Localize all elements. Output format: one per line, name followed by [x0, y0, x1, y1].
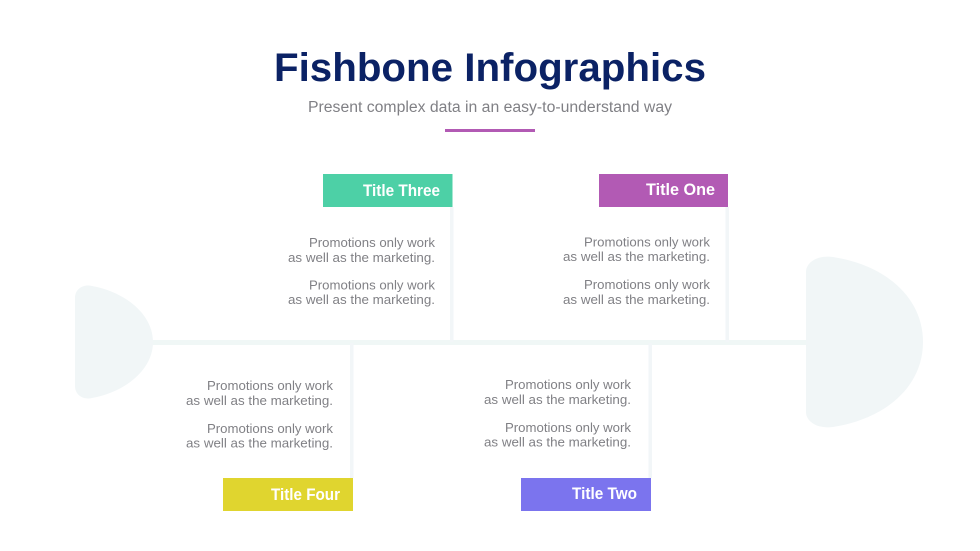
label: title two [521, 478, 651, 511]
text block: title two: as well as the marketing. [484, 434, 631, 450]
spine [150, 340, 810, 345]
label: title three [323, 174, 452, 207]
text block: title one: as well as the marketing. [563, 292, 710, 307]
bone: title two [648, 343, 652, 478]
text block: title four: Promotions only work [207, 378, 333, 393]
text block: title three: Promotions only work [309, 235, 435, 250]
text block: title four: as well as the marketing. [186, 436, 333, 450]
text block: title four: as well as the marketing. [186, 393, 333, 408]
fish skeleton [150, 207, 810, 478]
panel: title two [484, 377, 651, 511]
bone: title one [726, 207, 729, 342]
text block: title one: Promotions only work [584, 277, 710, 292]
bone: title three [450, 207, 454, 342]
subtitle: Present complex data in an easy-to-understand way [308, 99, 672, 116]
label: title one [599, 174, 728, 207]
text block: title one: as well as the marketing. [563, 249, 710, 264]
label: title two: Title Two [572, 485, 637, 503]
bone: title four [350, 343, 354, 478]
label: title one: Title One [646, 181, 715, 199]
text block: title one [563, 234, 710, 307]
label: title four: Title Four [271, 486, 341, 504]
text block: title four: Promotions only work [207, 421, 333, 436]
panel: title one [563, 174, 728, 307]
panel: title three [288, 174, 452, 307]
text block: title two: Promotions only work [505, 377, 631, 392]
text block: title two [484, 377, 631, 450]
text block: title two: Promotions only work [505, 420, 631, 435]
title accent line [445, 129, 535, 132]
text block: title three: as well as the marketing. [288, 250, 435, 265]
text block: title three: as well as the marketing. [288, 292, 435, 307]
text block: title three: Promotions only work [309, 278, 435, 292]
label: title four [223, 478, 353, 511]
text block: title two: as well as the marketing. [484, 392, 631, 407]
fish tail [75, 286, 153, 398]
text block: title three [288, 235, 435, 307]
fish head [806, 257, 923, 427]
panel: title four [186, 378, 353, 511]
label: title three: Title Three [363, 182, 440, 200]
title: Fishbone Infographics [274, 46, 706, 90]
text block: title four [186, 378, 333, 450]
text block: title one: Promotions only work [584, 234, 710, 250]
